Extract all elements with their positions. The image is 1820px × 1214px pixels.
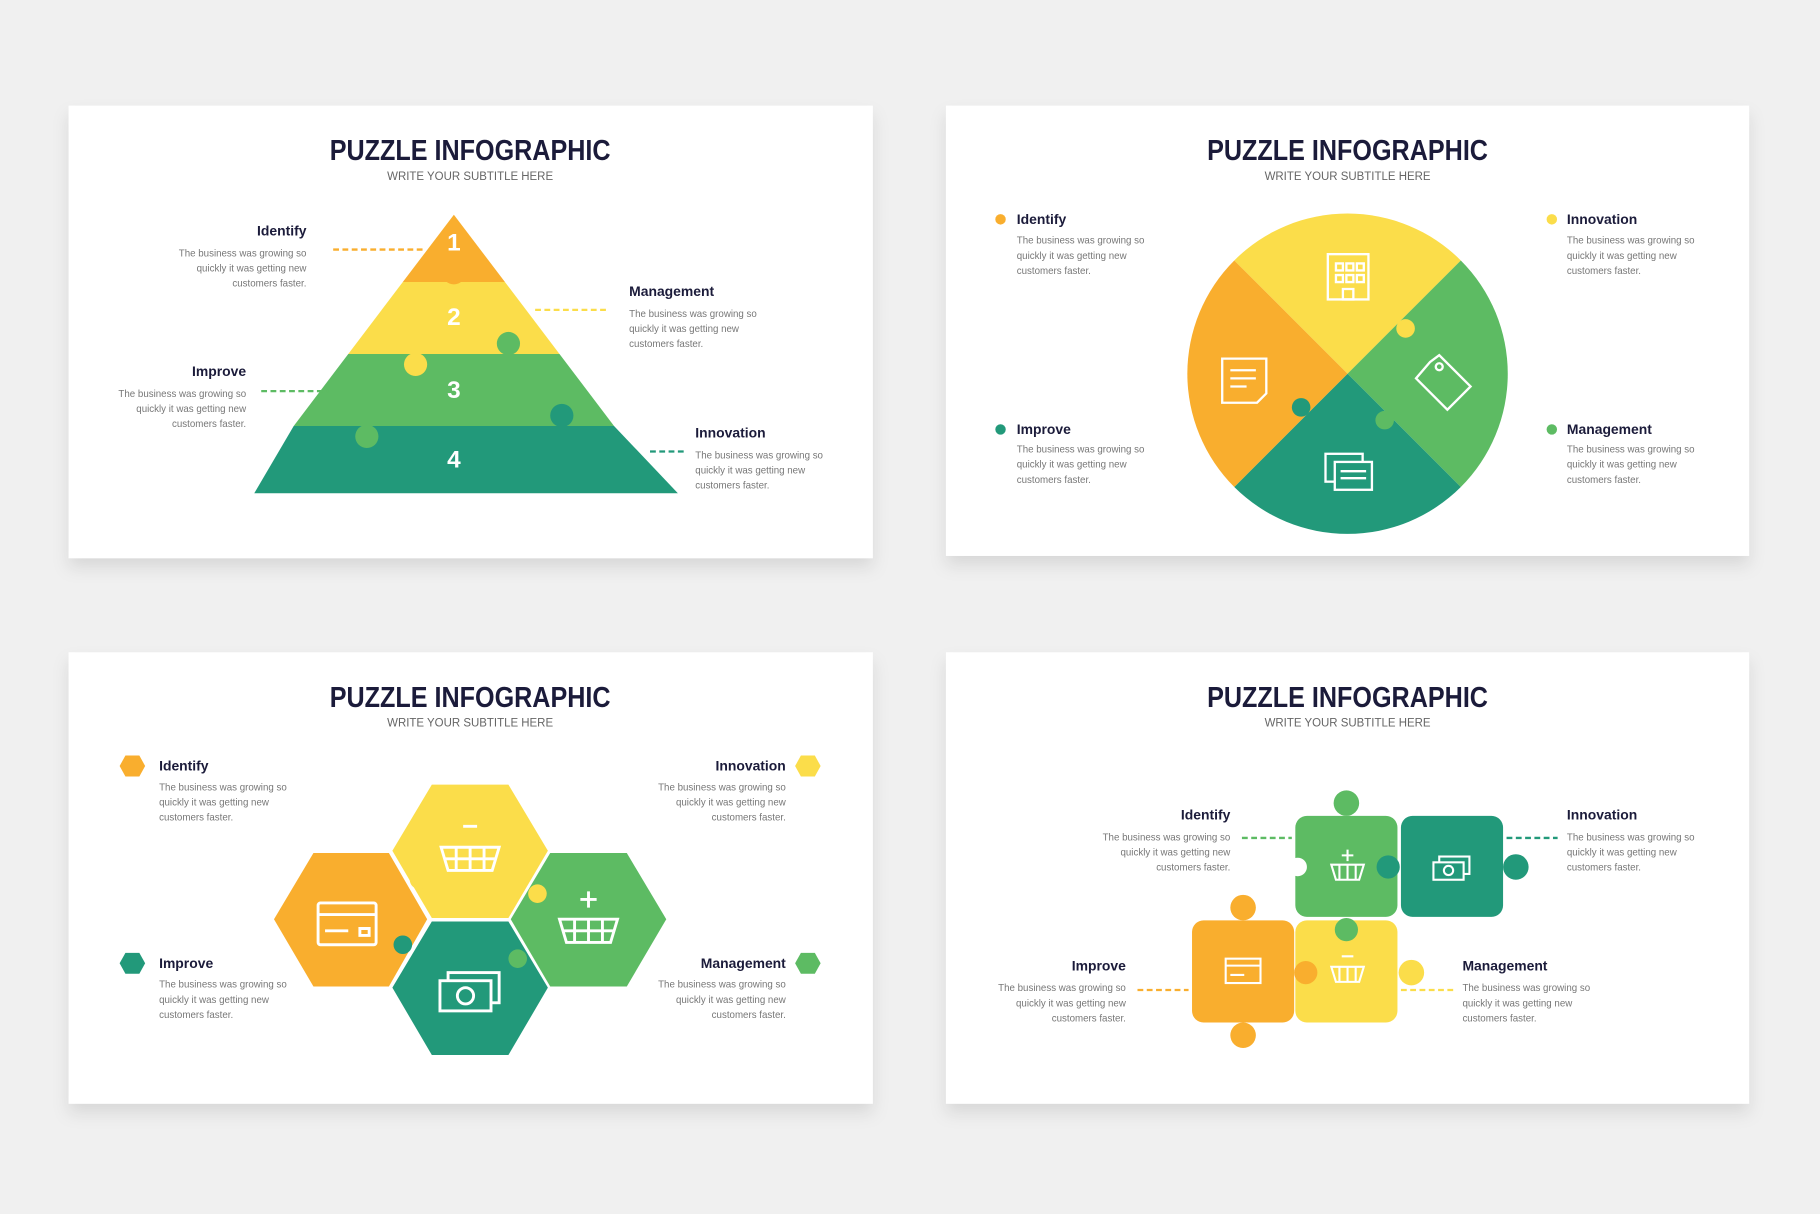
label: Identify: The business was growing so [1103,832,1230,843]
label: Improve [998,957,1189,1024]
label: Identify: quickly it was getting new [1120,847,1231,858]
label: Improve: customers faster. [172,419,246,430]
label: Identify: quickly it was getting new [1017,251,1128,262]
label: Innovation: quickly it was getting new [695,466,806,477]
label: Identify: quickly it was getting new [197,264,307,275]
title [1207,682,1488,730]
hexagon chart [274,785,666,1055]
label: Identify: Identify [1181,806,1231,822]
label: Management: Management [629,283,715,299]
label: Innovation: quickly it was getting new [1567,251,1678,262]
icon: tag [1416,355,1471,410]
label: Identify [1103,806,1292,873]
label: Management: Management [1462,957,1548,973]
label: Improve [118,363,329,430]
icon: document [1325,454,1372,490]
panel: jigsaw [946,652,1749,1104]
pyramid chart: 3 [447,377,461,404]
label: Improve: The business was growing so [1017,445,1144,456]
label: Identify: The business was growing so [179,248,306,259]
label: Improve: customers faster. [159,1010,233,1021]
label: Identify: Identify [1017,211,1066,227]
label: Management: Management [1567,421,1652,437]
title [330,135,611,183]
label: Innovation: quickly it was getting new [1567,847,1678,858]
label: Management [1547,421,1695,486]
label: Improve [995,421,1144,486]
label: Management: customers faster. [629,339,703,350]
label: Identify: customers faster. [1156,862,1230,873]
label: Innovation: The business was growing so [1567,832,1695,843]
label: Management: The business was growing so [1567,445,1695,456]
icon: money [440,973,499,1011]
label: Identify: The business was growing so [1017,236,1144,247]
label: Management: customers faster. [1567,475,1641,486]
label: Innovation: Innovation [1567,211,1637,227]
label: Innovation [658,756,821,824]
title: PUZZLE INFOGRAPHIC [1207,135,1488,167]
label: Management: The business was growing so [1462,983,1590,994]
pyramid chart: 2 [447,304,461,331]
label: Management: customers faster. [712,1010,786,1021]
label: Management: customers faster. [1462,1013,1537,1024]
label: Management: The business was growing so [629,309,757,320]
label: Management: quickly it was getting new [676,995,787,1006]
label: Improve: Improve [192,363,246,379]
label: Improve: The business was growing so [159,980,287,991]
label: Identify [179,223,424,290]
title: PUZZLE INFOGRAPHIC [1207,682,1488,714]
label: Innovation: customers faster. [1567,862,1641,873]
label: Innovation: Innovation [1567,806,1637,822]
label: Management: quickly it was getting new [629,324,740,335]
pyramid chart: 1 [447,230,461,257]
label: Identify: customers faster. [232,279,306,290]
label: Identify [120,756,287,824]
title: PUZZLE INFOGRAPHIC [330,682,611,714]
icon: building [1328,254,1368,299]
label: Identify [995,211,1144,277]
label: Identify: Identify [159,758,209,774]
title [1207,135,1488,183]
icon: money [1433,857,1469,880]
label: Management: quickly it was getting new [1567,460,1678,471]
icon: basket minus [1331,956,1364,982]
panel: hexagons [69,652,873,1104]
label: Innovation [1547,211,1695,277]
label: Improve: Improve [159,955,213,971]
icon: basket plus [559,891,618,942]
label: Innovation: Innovation [695,425,766,441]
title: WRITE YOUR SUBTITLE HERE [1265,716,1431,730]
label: Identify: quickly it was getting new [159,797,270,808]
label: Improve: quickly it was getting new [1017,460,1128,471]
label: Improve: quickly it was getting new [136,404,247,415]
panel: pyramid [69,106,873,558]
label: Innovation: customers faster. [712,813,786,824]
label: Improve: The business was growing so [998,983,1126,994]
label: Management [658,953,821,1021]
pyramid chart [254,215,678,493]
label: Innovation: The business was growing so [1567,236,1695,247]
icon: note [1222,359,1266,403]
label: Identify: customers faster. [1017,266,1091,277]
panel: circle [946,106,1749,556]
label: Innovation [1507,806,1695,873]
label: Improve: customers faster. [1017,475,1091,486]
label: Identify: customers faster. [159,813,233,824]
label: Innovation: quickly it was getting new [676,797,787,808]
label: Identify: Identify [257,223,307,239]
label: Improve: quickly it was getting new [159,995,270,1006]
label: Innovation: The business was growing so [695,450,823,461]
label: Innovation: customers faster. [1567,266,1641,277]
label: Innovation [650,425,823,492]
icon: basket minus [441,826,499,870]
label: Improve: Improve [1072,957,1126,973]
label: Improve: Improve [1017,421,1071,437]
title [330,682,611,730]
jigsaw chart [1192,790,1529,1048]
label: Management [1401,957,1590,1024]
icon: basket plus [1331,850,1364,880]
title: PUZZLE INFOGRAPHIC [330,135,611,167]
label: Innovation: The business was growing so [658,782,786,793]
label: Improve: quickly it was getting new [1016,998,1127,1009]
pyramid chart: 4 [447,447,461,474]
label: Improve [120,953,287,1021]
label: Management [535,283,757,350]
label: Innovation: Innovation [716,758,786,774]
label: Management: The business was growing so [658,980,786,991]
label: Management: Management [701,955,786,971]
title: WRITE YOUR SUBTITLE HERE [387,169,553,183]
icon: card [318,903,376,945]
icon: card [1226,959,1261,983]
title: WRITE YOUR SUBTITLE HERE [1265,169,1431,183]
label: Improve: customers faster. [1052,1013,1126,1024]
label: Innovation: customers faster. [695,481,769,492]
label: Management: quickly it was getting new [1462,998,1573,1009]
label: Identify: The business was growing so [159,782,287,793]
circle chart [1187,214,1508,534]
title: WRITE YOUR SUBTITLE HERE [387,716,553,730]
label: Improve: The business was growing so [118,389,246,400]
